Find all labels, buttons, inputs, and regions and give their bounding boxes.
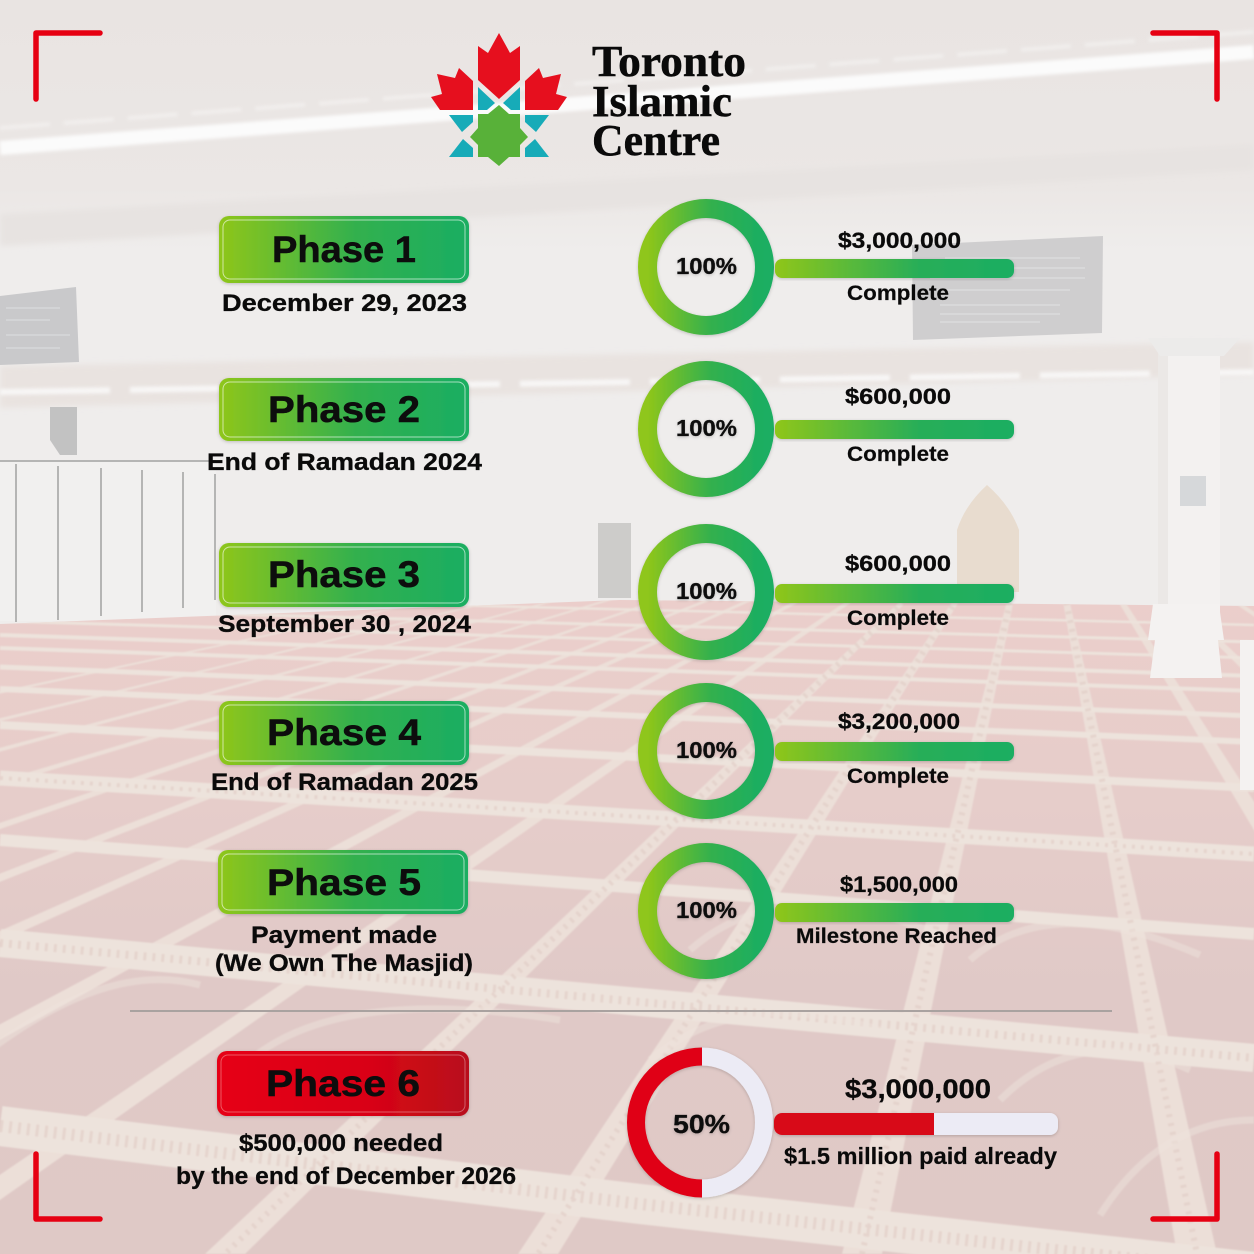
phase 2 progress bar bbox=[775, 384, 1014, 466]
phase 5 description: Payment made bbox=[251, 922, 437, 949]
phase 2 ring: 100% bbox=[676, 415, 737, 441]
phase 1 ring: 100% bbox=[676, 253, 737, 279]
phase 1 progress bar bbox=[775, 228, 1014, 305]
phase 3 badge bbox=[219, 543, 469, 607]
phase 4 ring: 100% bbox=[676, 737, 737, 763]
phase 3 ring: 100% bbox=[676, 578, 737, 604]
phase 4 badge: Phase 4 bbox=[267, 712, 421, 753]
phase 5 progress bar: Milestone Reached bbox=[796, 925, 997, 948]
phase 3 progress bar bbox=[775, 551, 1014, 630]
phase 1 row bbox=[219, 208, 1014, 326]
phase 1 ring bbox=[648, 208, 764, 326]
phase 6 description: $500,000 needed bbox=[239, 1130, 443, 1157]
phase 2 row bbox=[207, 370, 1014, 488]
phase 4 progress bar: $3,200,000 bbox=[838, 709, 960, 734]
phase 2 ring bbox=[648, 370, 764, 488]
phase 6 row bbox=[176, 1051, 1058, 1190]
phase 5 row bbox=[215, 850, 1014, 977]
phase 1 date: December 29, 2023 bbox=[222, 290, 467, 317]
phase 5 badge bbox=[218, 850, 468, 914]
phase 6 progress bar: $3,000,000 bbox=[845, 1074, 991, 1104]
logo wordmark: Islamic bbox=[592, 77, 732, 126]
phase 2 date: End of Ramadan 2024 bbox=[207, 449, 483, 476]
phase 1 badge: Phase 1 bbox=[272, 229, 416, 270]
phase 3 ring bbox=[648, 534, 764, 650]
phase 4 progress bar: Complete bbox=[847, 765, 949, 788]
phase 1 progress bar: $3,000,000 bbox=[838, 228, 961, 253]
logo wordmark bbox=[592, 37, 746, 165]
phase 2 progress bar: $600,000 bbox=[845, 384, 951, 409]
logo wordmark: Centre bbox=[592, 116, 720, 165]
phase 5 description: (We Own The Masjid) bbox=[215, 950, 473, 977]
phase 2 badge bbox=[219, 378, 469, 441]
phase 6 badge: Phase 6 bbox=[266, 1063, 420, 1104]
phase 4 progress bar bbox=[775, 709, 1014, 788]
icon: maple leaf and star bbox=[431, 33, 567, 166]
phase 6 progress bar bbox=[774, 1074, 1058, 1169]
phase 6 ring: 50 percent: 50% bbox=[673, 1109, 730, 1139]
phase 3 date: September 30 , 2024 bbox=[218, 611, 472, 638]
phase 5 badge: Phase 5 bbox=[267, 862, 421, 903]
phase 6 progress bar: $1.5 million paid already bbox=[784, 1143, 1057, 1169]
phase 2 badge: Phase 2 bbox=[268, 389, 420, 430]
phase 5 ring: 100% bbox=[676, 897, 737, 923]
phase 2 progress bar: Complete bbox=[847, 443, 949, 466]
phase 6 description: by the end of December 2026 bbox=[176, 1163, 516, 1190]
phase 4 row bbox=[211, 692, 1014, 810]
logo: Toronto Islamic Centre bbox=[431, 33, 746, 166]
phase 5 progress bar: $1,500,000 bbox=[840, 872, 958, 897]
phase 3 progress bar: Complete bbox=[847, 607, 949, 630]
phase 4 badge bbox=[219, 701, 469, 765]
phase 3 progress bar: $600,000 bbox=[845, 551, 951, 576]
phase 6 description bbox=[176, 1130, 516, 1190]
logo wordmark: Toronto bbox=[592, 37, 746, 86]
phase 4 date: End of Ramadan 2025 bbox=[211, 769, 478, 796]
phase 5 progress bar bbox=[775, 872, 1014, 948]
phase 5 description bbox=[215, 922, 473, 977]
phase 1 progress bar: Complete bbox=[847, 282, 949, 305]
phase 4 ring bbox=[648, 692, 764, 810]
phase 1 badge bbox=[219, 216, 469, 283]
phase 6 ring: 50 percent bbox=[636, 1056, 764, 1188]
phase 3 badge: Phase 3 bbox=[268, 554, 420, 595]
phase 6 badge bbox=[217, 1051, 469, 1116]
divider bbox=[130, 1010, 1112, 1012]
phase 3 row bbox=[218, 534, 1014, 650]
phase 5 ring bbox=[648, 852, 764, 970]
